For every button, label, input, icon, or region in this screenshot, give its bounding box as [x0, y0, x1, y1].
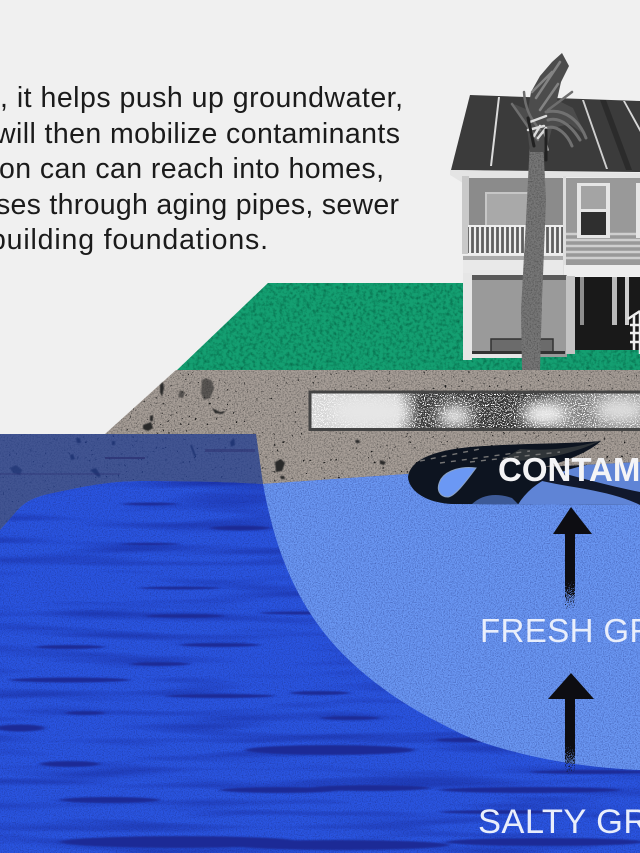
window: [577, 183, 610, 238]
stilt post: [566, 276, 575, 354]
explanatory text block: , it helps push up groundwater,: [0, 82, 403, 114]
left porch post: [462, 176, 469, 254]
garage wall: [463, 275, 567, 357]
contaminants label: CONTAM: [498, 451, 640, 488]
roof: [451, 95, 640, 172]
fresh groundwater lens: [263, 462, 640, 770]
explanatory text block: [0, 82, 403, 256]
sea level overlay above groundwater: [0, 434, 263, 530]
stairs: [628, 311, 640, 354]
lap siding: [566, 234, 640, 258]
lower arrow: [548, 673, 594, 775]
shadow floor: [472, 351, 565, 354]
contaminant plume: [408, 441, 640, 505]
upper arrow: [553, 507, 592, 610]
palm tree: [512, 53, 586, 370]
explanatory text block: ses through aging pipes, sewer: [0, 189, 400, 221]
dark water streaks: [0, 502, 640, 850]
plume hole: [438, 467, 476, 497]
green lawn: [176, 283, 640, 371]
deep salty groundwater: [0, 462, 640, 853]
crown fronds: [512, 62, 586, 160]
explanatory text block: on can can reach into homes,: [0, 153, 384, 185]
upper floor band: [463, 255, 566, 275]
trunk: [521, 140, 546, 370]
explanatory text block: will then mobilize contaminants: [0, 118, 400, 150]
balcony railing: [468, 225, 564, 255]
soil layer: [0, 370, 640, 560]
under-house shade: [575, 277, 640, 350]
house: [450, 95, 640, 360]
bench: [491, 339, 553, 352]
siding wall: [565, 178, 640, 266]
underground pipe: [310, 392, 640, 430]
broad water ripples: [0, 480, 640, 853]
left garage pillar: [463, 273, 472, 360]
lower band: [564, 265, 640, 276]
porch wall: [462, 178, 564, 228]
eave: [450, 170, 640, 183]
porch door: [486, 193, 530, 227]
crown mass: [514, 53, 586, 152]
